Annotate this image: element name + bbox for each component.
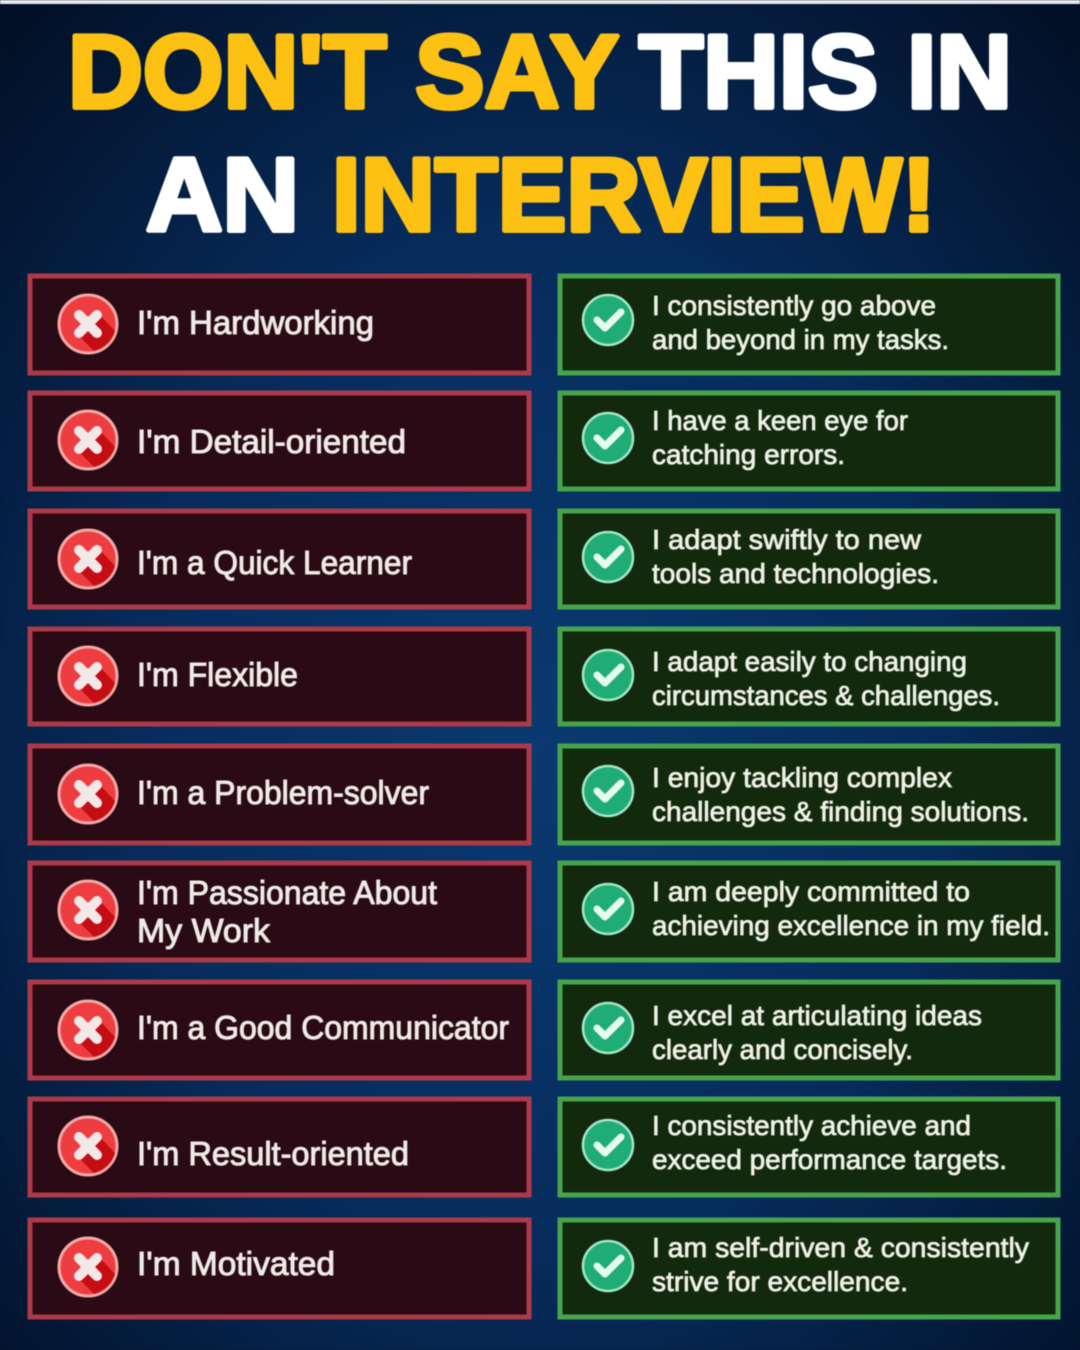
panel: don't say 3: I'm a Quick Learner (137, 544, 412, 581)
panel: say instead 2: catching errors. (652, 439, 845, 470)
panel: don't say 6: My Work (137, 912, 271, 949)
panel: don't say 8 (30, 1099, 529, 1195)
panel: say instead 8: exceed performance targets. (652, 1144, 1007, 1175)
panel: say instead 7: I excel at articulating ideas (652, 1000, 982, 1031)
panel: say instead 5 (560, 746, 1058, 843)
panel: say instead 2: I have a keen eye for (652, 405, 908, 436)
panel: say instead 7 (560, 982, 1058, 1078)
panel: don't say 4: I'm Flexible (137, 656, 298, 693)
panel: say instead 4: circumstances & challenges. (652, 680, 1000, 711)
panel: say instead 6 (560, 863, 1058, 960)
top white strip (0, 0, 1080, 4)
panel: say instead 4: I adapt easily to changing (652, 646, 967, 677)
panel: say instead 3: I adapt swiftly to new (652, 524, 922, 555)
panel: say instead 1: I consistently go above (652, 290, 936, 321)
panel: say instead 1 (560, 276, 1058, 373)
panel: don't say 4 (30, 629, 529, 724)
panel: don't say 7: I'm a Good Communicator (137, 1009, 509, 1046)
panel: don't say 1 (30, 276, 529, 373)
panel: don't say 1: I'm Hardworking (137, 304, 374, 341)
panel: say instead 6: I am deeply committed to (652, 876, 970, 907)
panel: don't say 2 (30, 393, 529, 489)
panel: don't say 7 (30, 982, 529, 1078)
panel: say instead 3 (560, 511, 1058, 607)
panel: say instead 9: I am self-driven & consistently (652, 1232, 1029, 1263)
panel: don't say 6 (30, 863, 529, 960)
panel: don't say 9: I'm Motivated (137, 1245, 335, 1282)
panel: say instead 9: strive for excellence. (652, 1266, 908, 1297)
panel: don't say 9 (30, 1220, 529, 1317)
panel: don't say 2: I'm Detail-oriented (137, 423, 406, 460)
title: AN (146, 138, 299, 254)
title (68, 14, 1012, 254)
panel: say instead 9 (560, 1220, 1058, 1317)
panel: don't say 6: I'm Passionate About (137, 874, 437, 911)
title: INTERVIEW! (332, 138, 936, 254)
panel: don't say 3 (30, 511, 529, 607)
title: THIS IN (639, 14, 1012, 130)
panel: say instead 5: I enjoy tackling complex (652, 762, 952, 793)
panel: say instead 8: I consistently achieve and (652, 1110, 971, 1141)
panel: say instead 2 (560, 393, 1058, 489)
title: DON'T SAY (68, 14, 619, 130)
panel: say instead 4 (560, 629, 1058, 724)
panel: don't say 5: I'm a Problem-solver (137, 774, 429, 811)
panel: say instead 1: and beyond in my tasks. (652, 324, 949, 355)
panel: say instead 6: achieving excellence in my field. (652, 910, 1050, 941)
panel: say instead 5: challenges & finding solutions. (652, 796, 1029, 827)
panel: say instead 8 (560, 1099, 1058, 1195)
panel: don't say 5 (30, 746, 529, 843)
panel: don't say 8: I'm Result-oriented (137, 1135, 409, 1172)
panel: say instead 3: tools and technologies. (652, 558, 939, 589)
panel: say instead 7: clearly and concisely. (652, 1034, 913, 1065)
